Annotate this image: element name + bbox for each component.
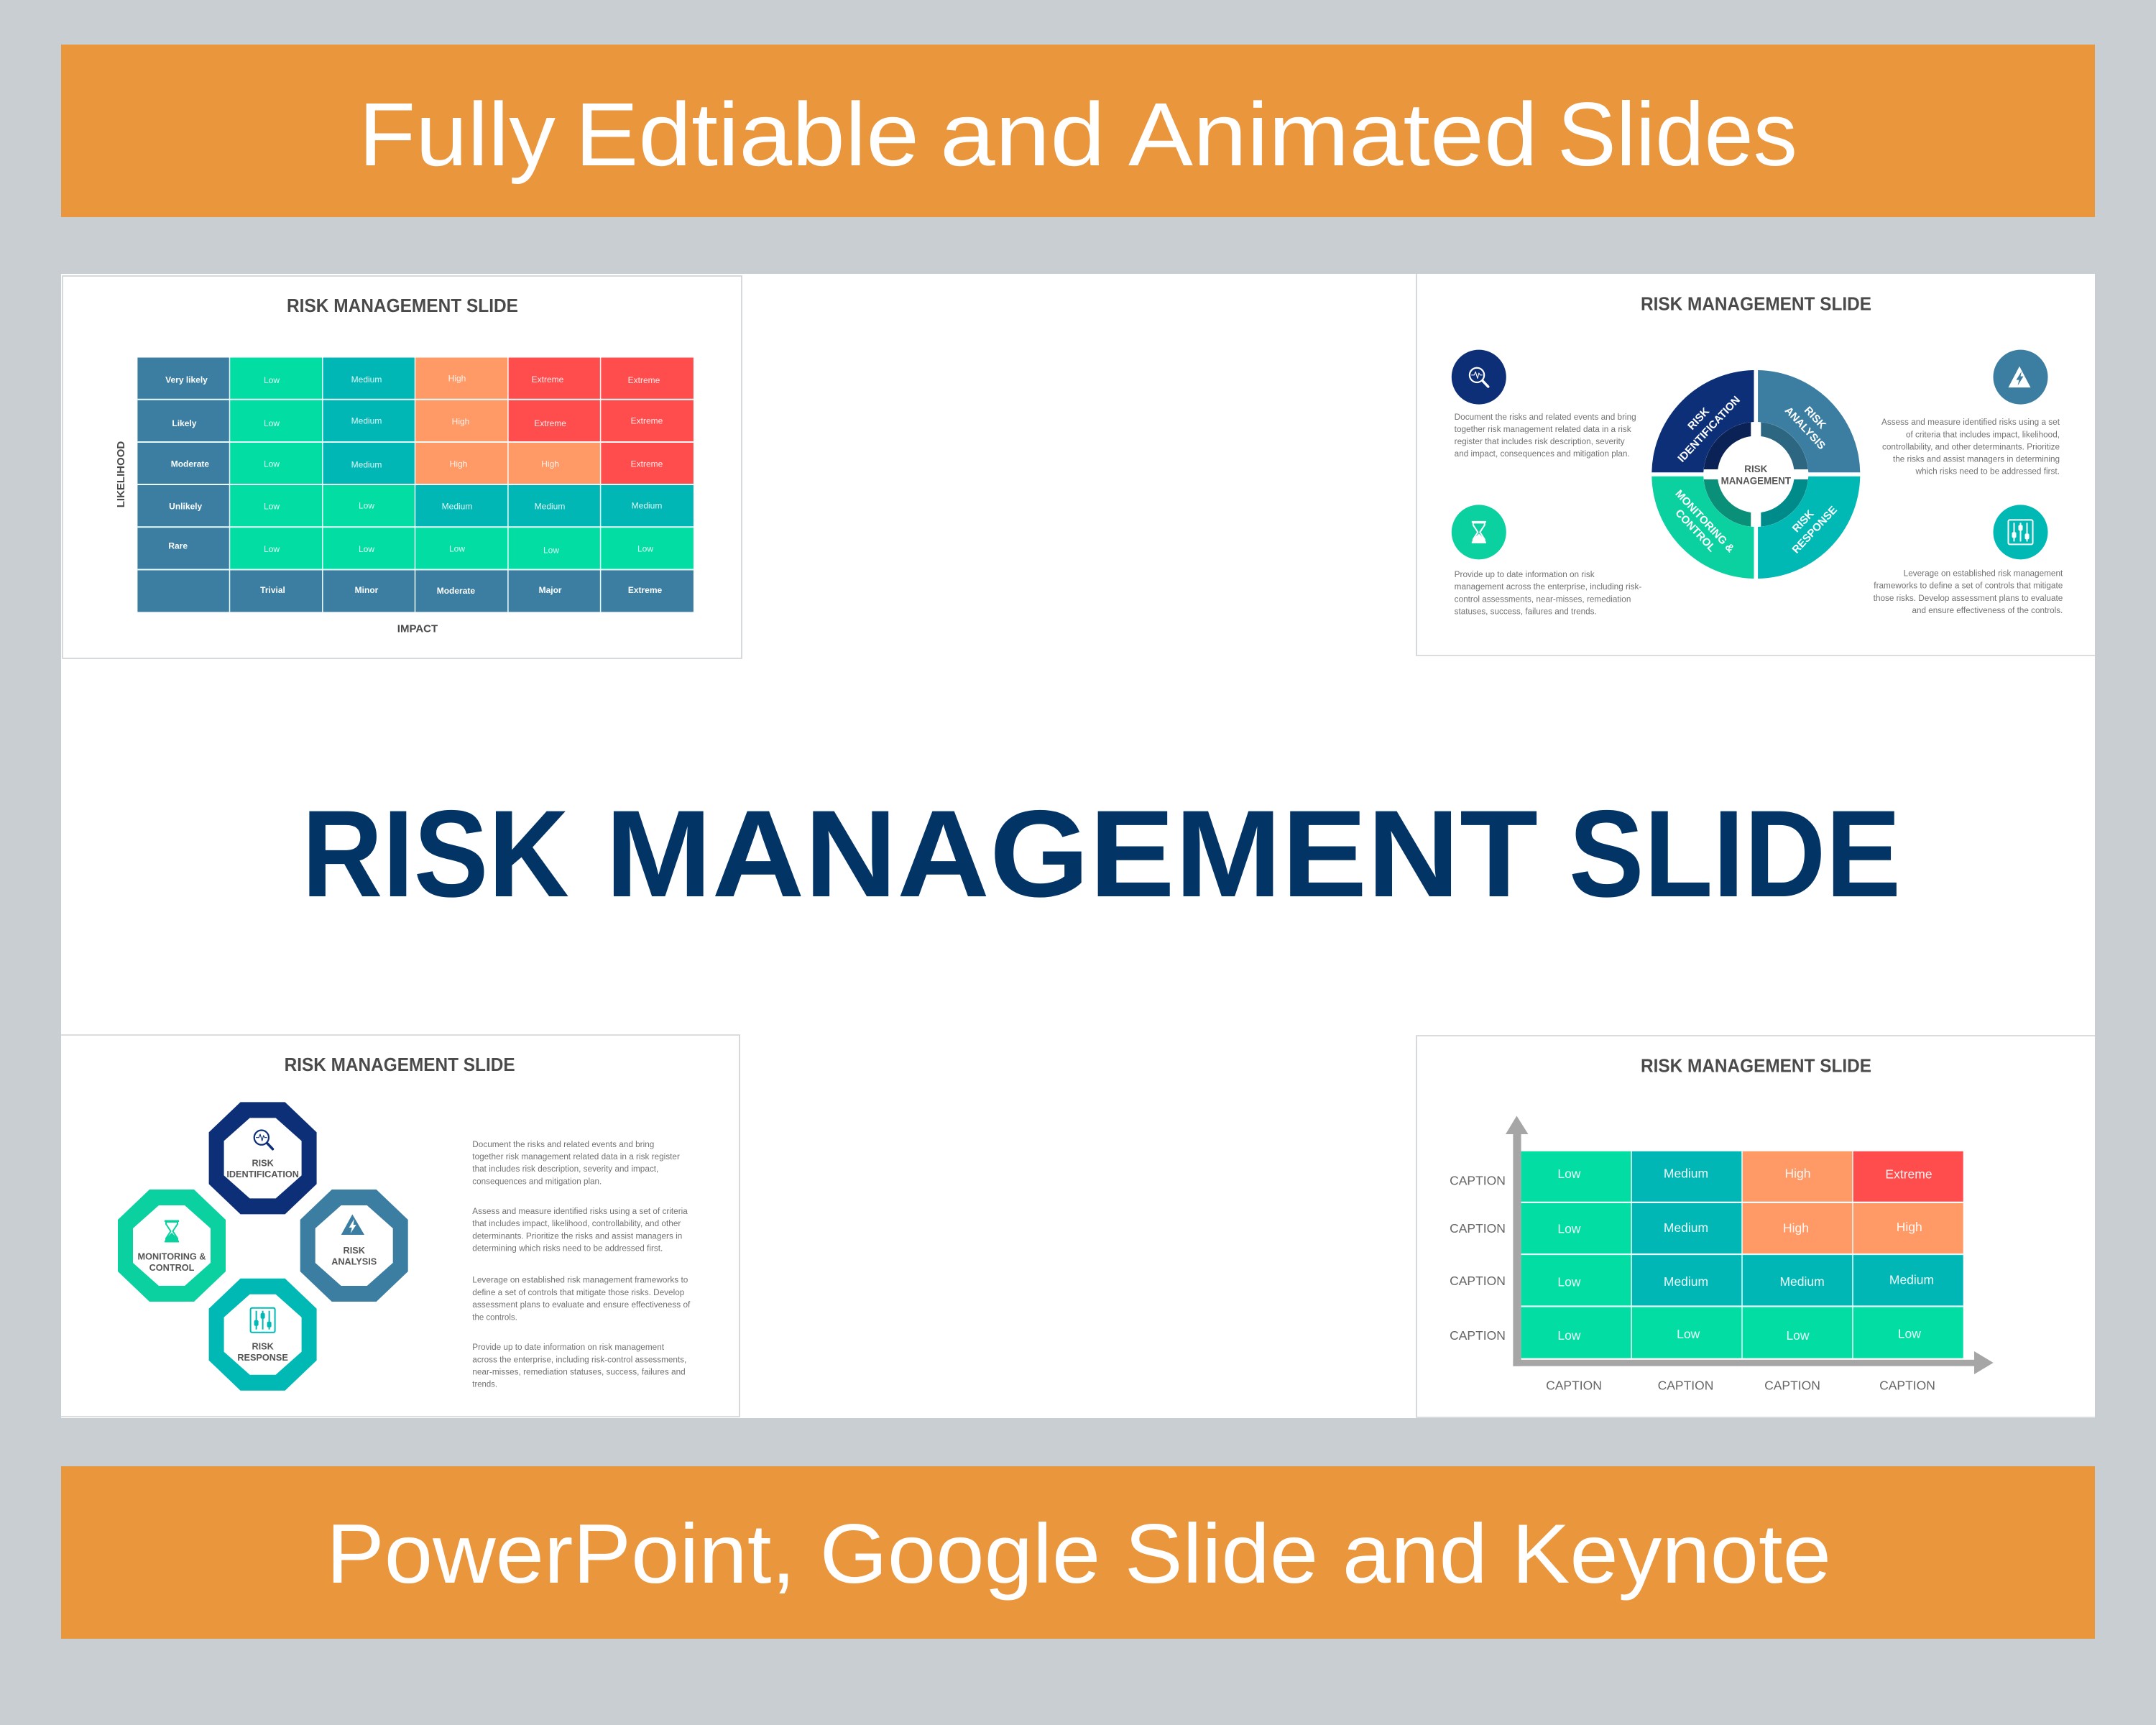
y captions: CAPTION bbox=[1450, 1221, 1506, 1236]
row: rare: Low bbox=[359, 544, 374, 554]
octagon: risk response: RESPONSE bbox=[237, 1353, 288, 1363]
banner text: fully editable: Fully bbox=[359, 85, 556, 185]
text: risk analysis: of criteria that includes impact, likelihood, bbox=[1906, 431, 2060, 439]
row 2: Medium bbox=[1664, 1220, 1708, 1235]
row: unlikely bbox=[137, 484, 694, 527]
row: unlikely: Unlikely bbox=[169, 502, 203, 512]
panel: octagon process bbox=[61, 1035, 740, 1417]
row 4: Low bbox=[1898, 1326, 1921, 1340]
text: block three bbox=[472, 1276, 691, 1322]
panel: risk management donut cycle bbox=[1416, 274, 2095, 656]
central white canvas bbox=[61, 274, 2095, 1418]
row: likely: High bbox=[452, 417, 469, 427]
row: rare: Low bbox=[543, 545, 559, 555]
text: risk identification bbox=[1455, 413, 1636, 459]
text: block two bbox=[472, 1208, 688, 1253]
row 4 bbox=[1521, 1307, 1963, 1358]
x captions: CAPTION bbox=[1546, 1379, 1602, 1393]
row: likely: Extreme bbox=[534, 418, 566, 428]
row: moderate bbox=[137, 442, 694, 484]
icon: magnifier circle bbox=[1452, 350, 1506, 405]
panel title: RISK MANAGEMENT SLIDE bbox=[1641, 293, 1871, 315]
text: block one: Document the risks and related events and bring bbox=[472, 1141, 654, 1149]
row: impact headers: Extreme bbox=[628, 585, 663, 595]
row: moderate: Moderate bbox=[171, 459, 209, 469]
banner text: fully editable: Slides bbox=[1557, 85, 1797, 185]
text: block four bbox=[472, 1343, 686, 1389]
text: monitoring and control bbox=[1455, 571, 1641, 617]
text: risk analysis: Assess and measure identified risks using a set bbox=[1881, 418, 2060, 427]
main title: SLIDE bbox=[1569, 785, 1901, 923]
main title: MANAGEMENT bbox=[605, 785, 1538, 923]
row 1 bbox=[1521, 1151, 1963, 1202]
text: block two: determining which risks need to be addressed first. bbox=[472, 1244, 663, 1253]
row 1: Medium bbox=[1664, 1166, 1708, 1180]
matrix table bbox=[137, 358, 694, 612]
row 1: High bbox=[1785, 1166, 1811, 1180]
row: unlikely: Medium bbox=[632, 500, 662, 510]
text: block four: across the enterprise, including risk-control assessments, bbox=[472, 1356, 686, 1364]
octagon: monitoring and control bbox=[118, 1190, 226, 1302]
octagon: monitoring and control: CONTROL bbox=[149, 1263, 195, 1273]
text: risk response: those risks. Develop assessment plans to evaluate bbox=[1874, 594, 2063, 603]
x captions: CAPTION bbox=[1764, 1379, 1820, 1393]
row 3 bbox=[1521, 1254, 1963, 1307]
row: rare bbox=[137, 527, 694, 569]
octagon: risk analysis: ANALYSIS bbox=[331, 1256, 377, 1266]
text: risk analysis: the risks and assist managers in determining bbox=[1893, 456, 2060, 464]
text: risk analysis: controllability, and other determinants. Prioritize bbox=[1882, 443, 2060, 451]
octagon: risk identification bbox=[209, 1102, 317, 1214]
row 3: Medium bbox=[1779, 1274, 1825, 1289]
main title: RISK bbox=[302, 785, 569, 923]
row: rare: Low bbox=[449, 543, 465, 553]
heat map grid bbox=[1521, 1151, 1963, 1358]
text: risk identification: together risk management related data in a risk bbox=[1455, 426, 1631, 434]
text: monitoring and control: control assessments, near-misses, remediation bbox=[1455, 596, 1631, 604]
x captions bbox=[1546, 1379, 1935, 1393]
row: rare: Low bbox=[637, 543, 653, 553]
text: risk identification: register that includes risk description, severity bbox=[1455, 438, 1625, 446]
panel title: RISK MANAGEMENT SLIDE bbox=[285, 1054, 515, 1075]
x axis label: IMPACT bbox=[397, 622, 438, 635]
y captions: CAPTION bbox=[1450, 1328, 1506, 1343]
octagon: risk analysis bbox=[300, 1190, 408, 1302]
y captions bbox=[1450, 1173, 1506, 1343]
row: very likely: High bbox=[448, 374, 466, 384]
arrow: vertical axis bbox=[1506, 1116, 1528, 1366]
row: very likely: Very likely bbox=[165, 375, 208, 385]
donut centre label: MANAGEMENT bbox=[1721, 475, 1792, 486]
top banner bbox=[61, 45, 2095, 217]
row: unlikely: Low bbox=[359, 500, 374, 510]
row: moderate: Extreme bbox=[631, 459, 663, 469]
row: impact headers: Major bbox=[539, 585, 562, 595]
segment: monitoring and control bbox=[1651, 477, 1754, 579]
text: risk analysis: which risks need to be addressed first. bbox=[1915, 468, 2060, 477]
text: monitoring and control: statuses, success, failures and trends. bbox=[1455, 608, 1597, 617]
row: moderate: High bbox=[450, 459, 467, 469]
panel: caption risk matrix bbox=[1416, 1036, 2095, 1417]
row: very likely: Extreme bbox=[628, 375, 660, 385]
row: unlikely: Medium bbox=[442, 502, 472, 512]
row: moderate: Low bbox=[264, 459, 280, 469]
row 4: Low bbox=[1786, 1328, 1810, 1343]
row: very likely: Extreme bbox=[532, 374, 564, 385]
row: rare: Low bbox=[264, 544, 280, 554]
text: block two: determinants. Prioritize the risks and assist managers in bbox=[472, 1232, 682, 1241]
row 1: Low bbox=[1557, 1167, 1581, 1181]
text: risk response: frameworks to define a set of controls that mitigate bbox=[1874, 582, 2063, 591]
segment: risk analysis bbox=[1758, 370, 1860, 472]
row: unlikely: Medium bbox=[535, 502, 565, 512]
panel: risk matrix with likelihood and impact bbox=[63, 276, 742, 658]
row: likely: Medium bbox=[351, 415, 382, 426]
row 3: Low bbox=[1557, 1275, 1581, 1289]
text: block four: Provide up to date information on risk management bbox=[472, 1343, 665, 1352]
text: block three: the controls. bbox=[472, 1314, 517, 1322]
icon: warning triangle circle bbox=[1994, 350, 2048, 405]
row 2: Low bbox=[1557, 1221, 1581, 1236]
octagon: risk identification: RISK bbox=[252, 1158, 275, 1168]
donut chart bbox=[1651, 370, 1860, 579]
row: very likely: Low bbox=[264, 375, 280, 385]
row: impact headers: Trivial bbox=[260, 585, 285, 595]
banner text: fully editable: Edtiable bbox=[575, 85, 919, 185]
segment: risk identification bbox=[1651, 370, 1754, 472]
text: risk response bbox=[1874, 569, 2063, 615]
text: block one: consequences and mitigation plan. bbox=[472, 1178, 602, 1187]
donut centre label: RISK bbox=[1744, 464, 1768, 474]
banner text: fully editable: Animated bbox=[1128, 85, 1538, 185]
octagon: risk response bbox=[209, 1279, 317, 1391]
text: block three: assessment plans to evaluate and ensure effectiveness of bbox=[472, 1301, 691, 1310]
row 3: Medium bbox=[1889, 1273, 1934, 1287]
text: description blocks bbox=[472, 1141, 691, 1389]
row: likely: Low bbox=[264, 418, 280, 428]
row: very likely: Medium bbox=[351, 374, 382, 385]
banner text: formats: PowerPoint, Google Slide and Keynote bbox=[326, 1506, 1831, 1601]
arrow: horizontal axis bbox=[1513, 1351, 1994, 1374]
row: impact headers: Minor bbox=[355, 585, 379, 595]
text: monitoring and control: management across the enterprise, including risk- bbox=[1455, 583, 1641, 592]
row: moderate: Medium bbox=[351, 460, 382, 470]
segment: risk identification: IDENTIFICATION bbox=[1675, 394, 1743, 465]
text: risk identification: Document the risks and related events and bring bbox=[1455, 413, 1636, 422]
text: risk identification: and impact, consequences and mitigation plan. bbox=[1455, 450, 1630, 459]
x captions: CAPTION bbox=[1879, 1379, 1935, 1393]
row 2: High bbox=[1783, 1221, 1809, 1236]
text: risk analysis bbox=[1881, 418, 2060, 477]
panel title: RISK MANAGEMENT SLIDE bbox=[1641, 1055, 1871, 1077]
x captions: CAPTION bbox=[1658, 1379, 1713, 1393]
y axis label: LIKELIHOOD bbox=[115, 441, 127, 507]
text: block four: near-misses, remediation statuses, success, failures and bbox=[472, 1368, 686, 1377]
segment: monitoring and control: MONITORING & bbox=[1672, 488, 1737, 555]
segment: monitoring and control: CONTROL bbox=[1672, 507, 1718, 554]
row: moderate: High bbox=[541, 459, 559, 469]
segment: risk analysis: ANALYSIS bbox=[1782, 405, 1828, 452]
row: rare: Rare bbox=[168, 540, 188, 551]
octagon: risk identification: IDENTIFICATION bbox=[226, 1169, 299, 1179]
segment: risk identification: RISK bbox=[1685, 405, 1712, 433]
row: unlikely: Low bbox=[264, 502, 280, 512]
row: impact headers bbox=[137, 569, 694, 612]
bottom banner bbox=[61, 1466, 2095, 1639]
text: block one: together risk management related data in a risk register bbox=[472, 1153, 680, 1162]
donut centre label bbox=[1721, 464, 1792, 486]
y captions: CAPTION bbox=[1450, 1274, 1506, 1288]
icon: hourglass circle bbox=[1452, 505, 1506, 559]
panel title: RISK MANAGEMENT SLIDE bbox=[287, 295, 518, 316]
octagon: risk response: RISK bbox=[252, 1342, 275, 1352]
octagon: risk analysis: RISK bbox=[344, 1246, 366, 1256]
octagon: monitoring and control: MONITORING & bbox=[138, 1252, 206, 1262]
text: risk response: and ensure effectiveness of the controls. bbox=[1912, 607, 2063, 615]
text: risk response: Leverage on established risk management bbox=[1904, 569, 2063, 578]
row: likely: Likely bbox=[172, 418, 197, 428]
row: very likely bbox=[137, 358, 694, 400]
icon: sliders circle bbox=[1994, 505, 2048, 559]
segment: risk response: RESPONSE bbox=[1790, 504, 1840, 556]
row 2 bbox=[1521, 1202, 1963, 1254]
segment: risk response bbox=[1758, 477, 1860, 579]
row 1: Extreme bbox=[1885, 1167, 1932, 1182]
row: likely: Extreme bbox=[631, 415, 663, 426]
segment: risk analysis: RISK bbox=[1802, 404, 1828, 431]
y captions: CAPTION bbox=[1450, 1173, 1506, 1187]
text: block three: Leverage on established risk management frameworks to bbox=[472, 1276, 688, 1285]
row: impact headers: Moderate bbox=[437, 586, 475, 596]
row 4: Low bbox=[1677, 1327, 1700, 1341]
row 3: Medium bbox=[1664, 1274, 1708, 1289]
row 4: Low bbox=[1557, 1328, 1581, 1343]
banner text: fully editable: and bbox=[940, 85, 1105, 185]
text: block four: trends. bbox=[472, 1381, 497, 1389]
text: block one: that includes risk description, severity and impact, bbox=[472, 1165, 658, 1174]
segment: risk response: RISK bbox=[1790, 507, 1817, 535]
row: likely bbox=[137, 400, 694, 442]
text: block two: Assess and measure identified risks using a set of criteria bbox=[472, 1208, 688, 1216]
text: block two: that includes impact, likelihood, controllability, and other bbox=[472, 1220, 681, 1228]
row 2: High bbox=[1897, 1220, 1922, 1234]
text: monitoring and control: Provide up to date information on risk bbox=[1455, 571, 1595, 579]
text: block three: define a set of controls that mitigate those risks. Develop bbox=[472, 1289, 684, 1297]
text: block one bbox=[472, 1141, 680, 1187]
